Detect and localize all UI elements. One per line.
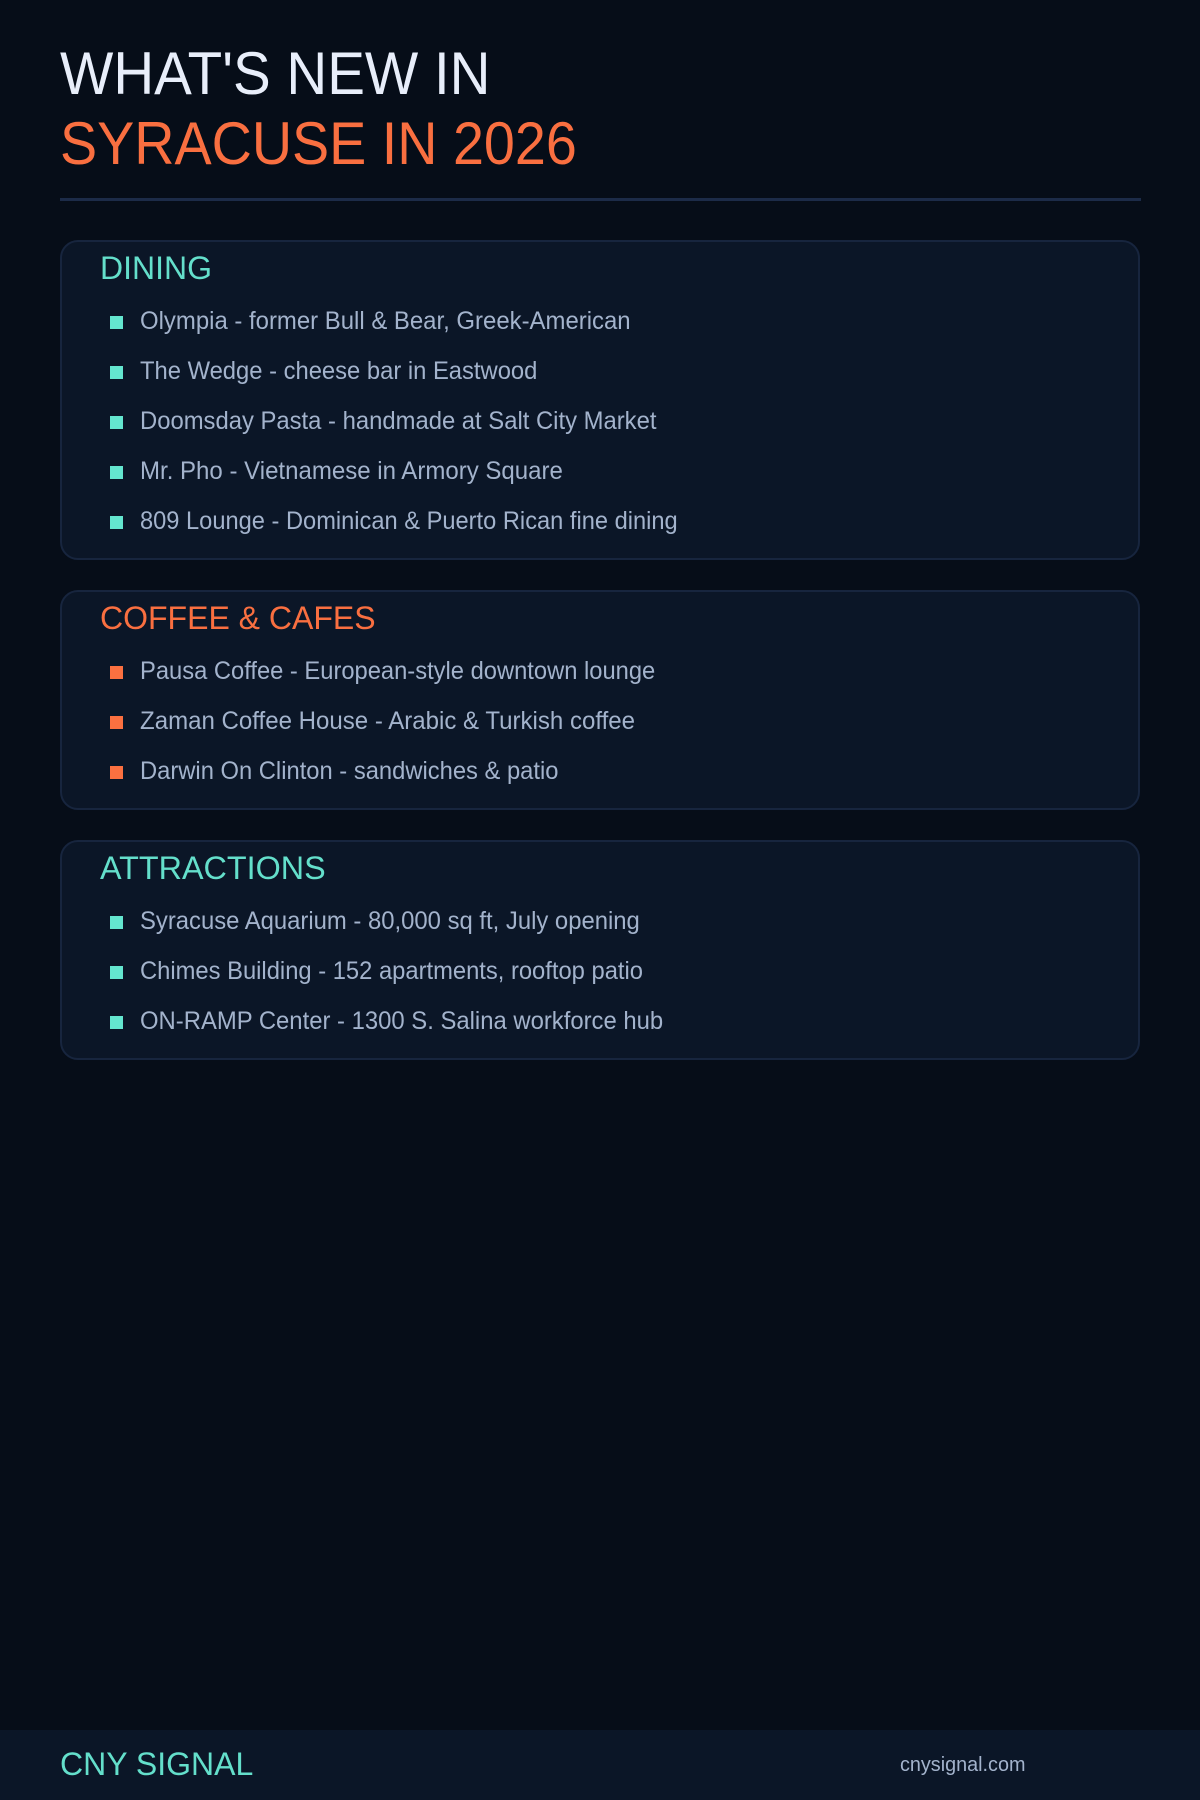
item: Mr. Pho: Mr. Pho - Vietnamese in Armory Square — [140, 457, 563, 485]
item: Zaman Coffee House: Zaman Coffee House - Arabic & Turkish coffee — [140, 707, 635, 735]
panel: dining — [60, 240, 1140, 560]
footer brand: CNY SIGNAL — [60, 1746, 253, 1782]
item: Chimes Building: Chimes Building - 152 apartments, rooftop patio — [140, 957, 643, 985]
item: Doomsday Pasta: Doomsday Pasta - handmade at Salt City Market — [140, 407, 656, 435]
heading: dining: DINING — [100, 250, 212, 286]
item: Pausa Coffee: Pausa Coffee - European-style downtown lounge — [140, 657, 655, 685]
panel: attractions — [60, 840, 1140, 1060]
item: Olympia: Olympia - former Bull & Bear, Greek-American — [140, 307, 631, 335]
item: 809 Lounge: 809 Lounge - Dominican & Puerto Rican fine dining — [140, 507, 678, 535]
panel: coffee and cafes — [60, 590, 1140, 810]
item: ON-RAMP Center: ON-RAMP Center - 1300 S. Salina workforce hub — [140, 1007, 663, 1035]
title — [60, 40, 577, 177]
footer — [0, 1730, 1200, 1800]
title line 1: WHAT'S NEW IN — [60, 40, 490, 107]
footer url: cnysignal.com — [900, 1754, 1025, 1776]
item: Darwin On Clinton: Darwin On Clinton - sandwiches & patio — [140, 757, 558, 785]
heading: attractions: ATTRACTIONS — [100, 850, 326, 886]
item: Syracuse Aquarium: Syracuse Aquarium - 80,000 sq ft, July opening — [140, 907, 640, 935]
item: The Wedge: The Wedge - cheese bar in Eastwood — [140, 357, 537, 385]
heading: coffee and cafes: COFFEE & CAFES — [100, 600, 376, 636]
title line 2: SYRACUSE IN 2026 — [60, 110, 577, 177]
